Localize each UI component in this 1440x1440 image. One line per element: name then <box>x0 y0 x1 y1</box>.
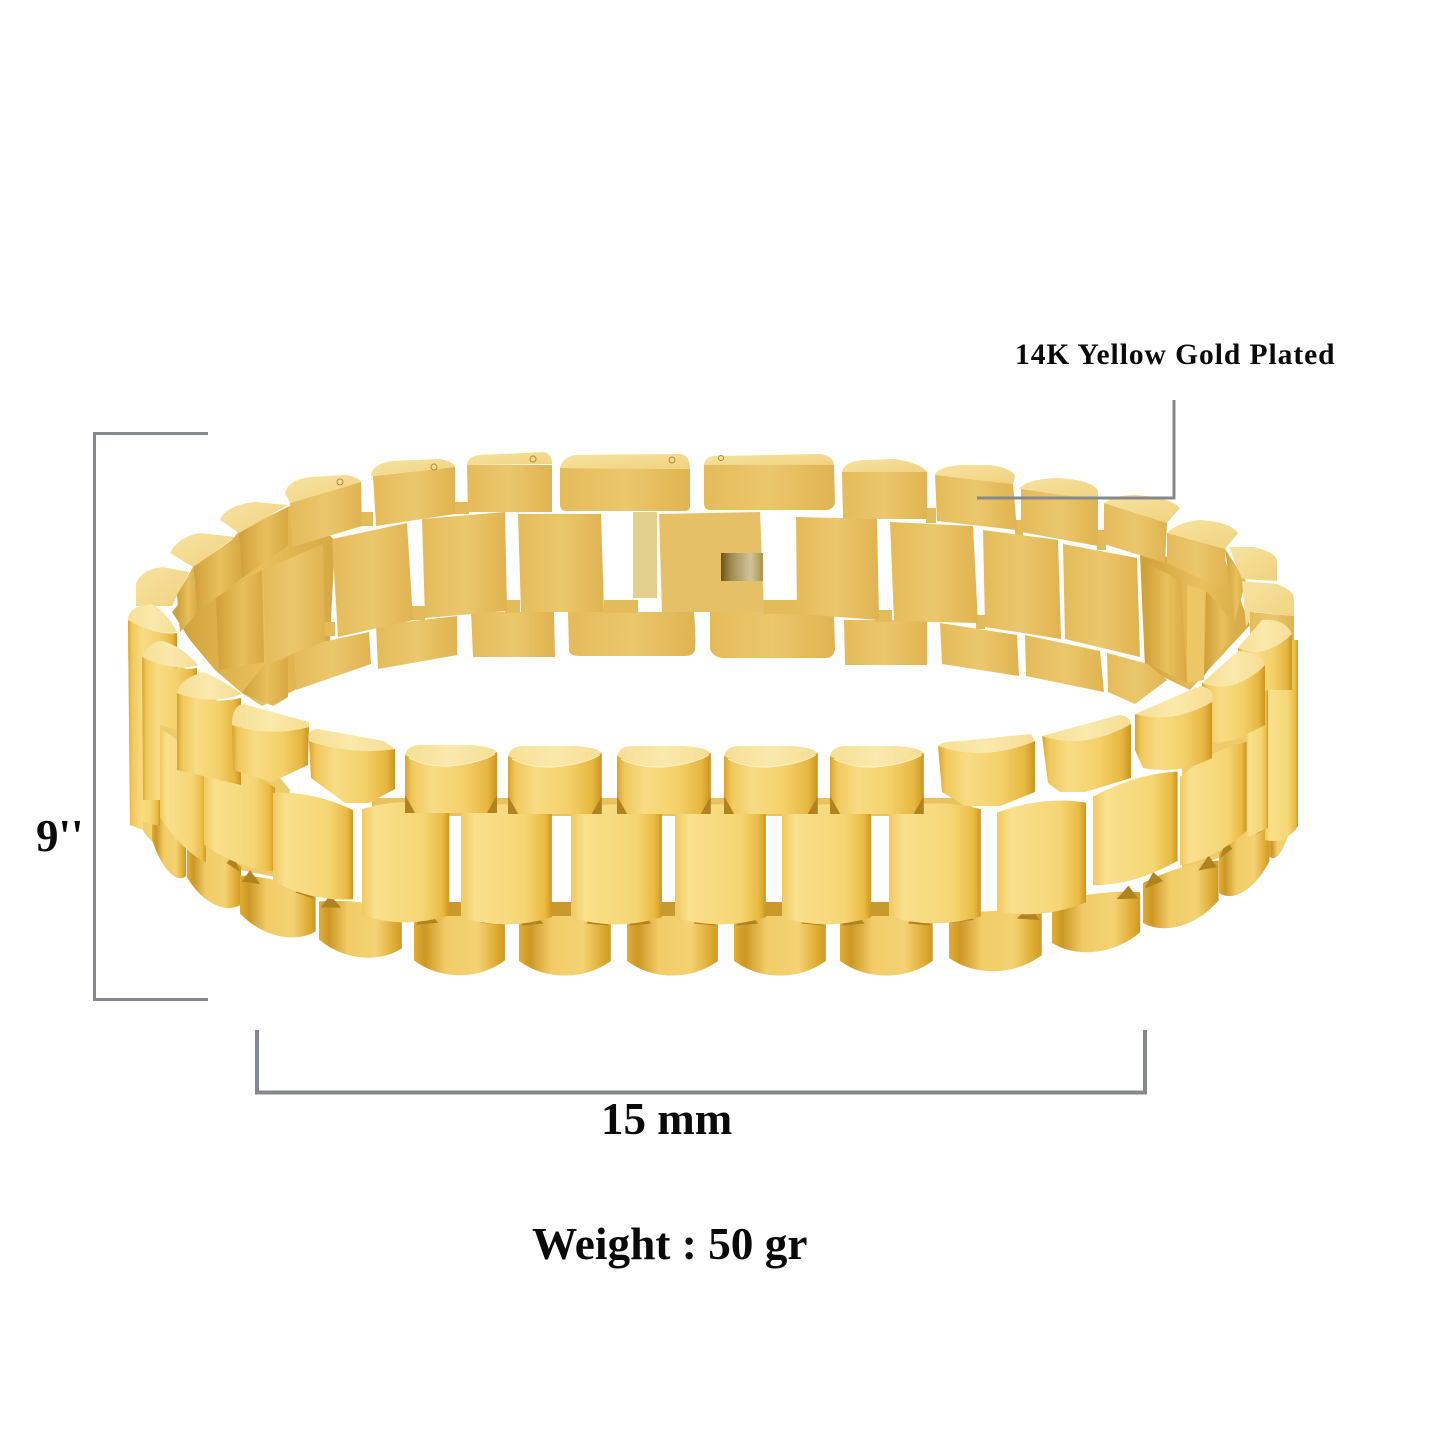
dimension bracket: length <box>94 434 208 1000</box>
front row: lower links <box>133 762 1292 976</box>
label: width 15 mm: 15 mm <box>601 1094 732 1144</box>
callout line: plating <box>977 400 1174 498</box>
back row: upper links <box>136 452 1294 645</box>
back row: connector pieces <box>323 502 1106 636</box>
side backing: curved ends of the front row <box>128 625 1296 880</box>
back row: lower links <box>242 612 1167 706</box>
callout label: plating: 14K Yellow Gold Plated <box>1015 339 1336 371</box>
inner band backing, shaded sides <box>172 505 1250 706</box>
label: weight: Weight : 50 gr <box>532 1219 808 1269</box>
label: length 9 inches: 9'' <box>36 811 84 861</box>
clasp hinge and buckle <box>633 512 764 612</box>
front row: centre links <box>128 640 1298 924</box>
bracelet photo illustration <box>128 452 1298 976</box>
dimension bracket: width <box>257 1030 1145 1092</box>
front row: hinge strips <box>372 798 972 916</box>
back row: centre links <box>216 512 1238 683</box>
front row: upper half-round links <box>128 604 1292 830</box>
